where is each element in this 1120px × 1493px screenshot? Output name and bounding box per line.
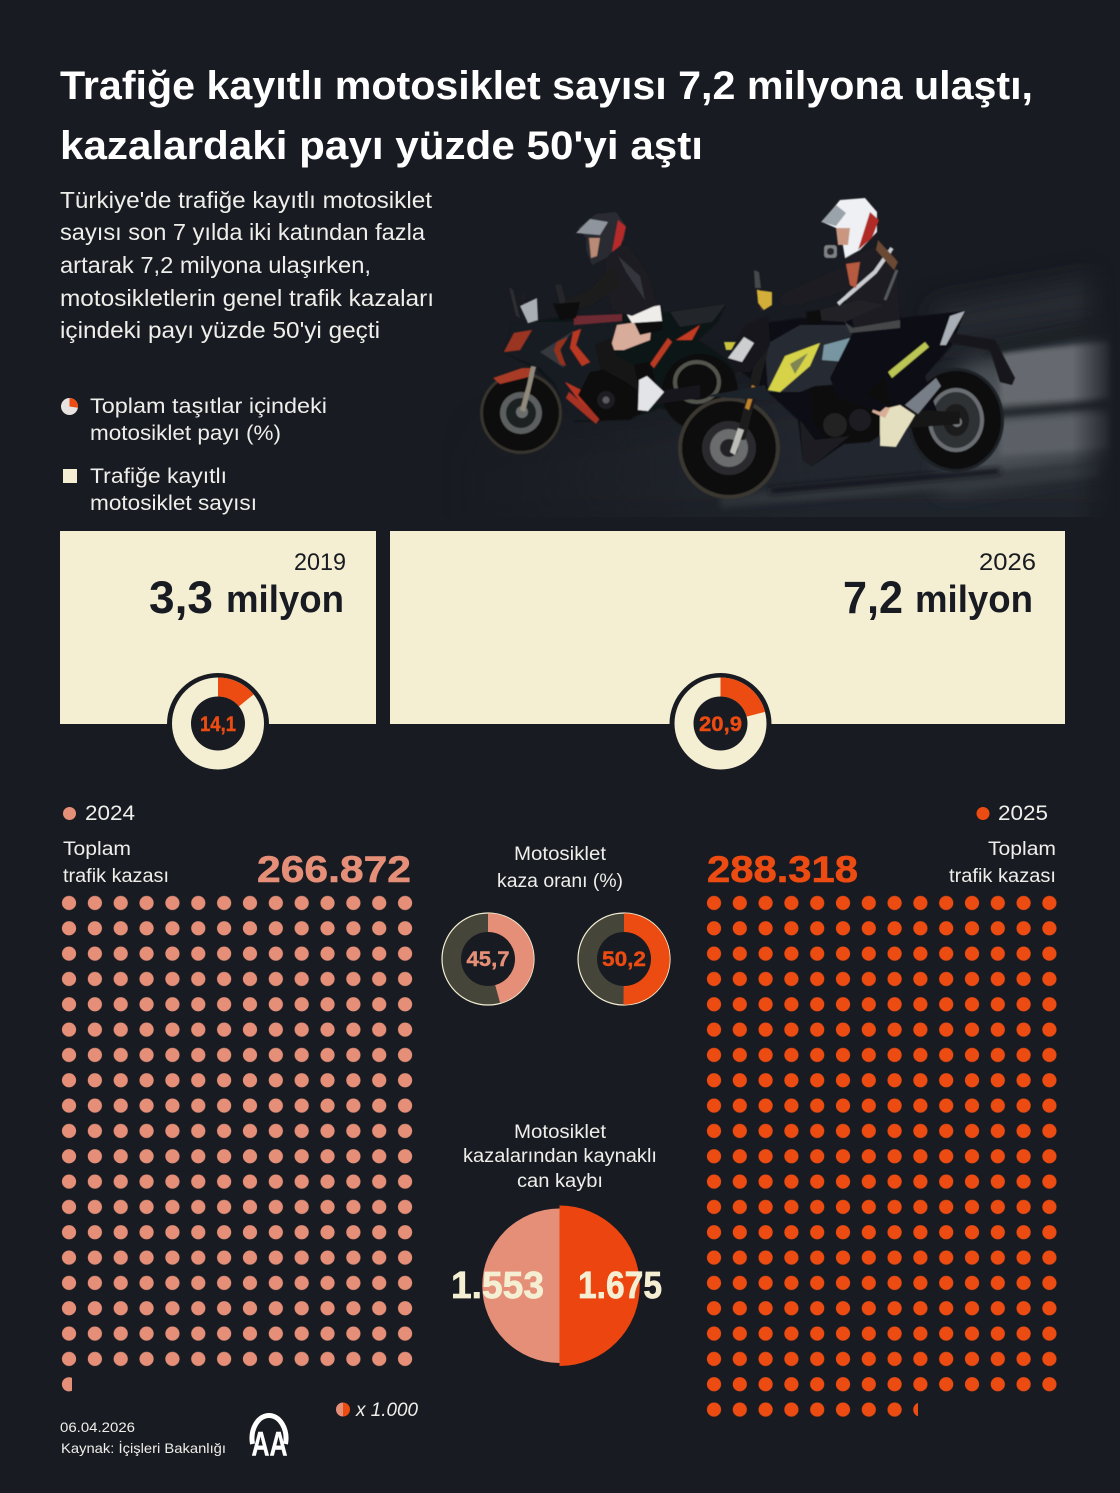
intro text block [60, 187, 434, 343]
rear wheel [662, 354, 738, 430]
tail and seat [670, 304, 726, 327]
legend: registered motorcycles: motosiklet sayısı [90, 492, 257, 515]
dot chart: 2024 accidents [56, 890, 418, 1391]
panel: 2026: milyon [915, 579, 1033, 621]
legend: motorcycle share: Toplam taşıtlar içindeki [90, 395, 327, 418]
back motorcycle and rider [480, 212, 742, 454]
road background with motion streaks [674, 278, 1110, 517]
intro text block: artarak 7,2 milyona ulaşırken, [60, 252, 371, 278]
legend: registered motorcycles [63, 465, 257, 515]
silhouette [503, 304, 735, 422]
donut: 2025 rate [578, 913, 670, 1005]
helmet and action camera [822, 198, 877, 258]
icon: cream square [63, 469, 77, 483]
heading: 2025 [976, 802, 1048, 825]
donut: 2024 rate [442, 913, 534, 1005]
heading: fatalities [463, 1122, 657, 1192]
intro text block: Türkiye'de trafiğe kayıtlı motosiklet [60, 187, 433, 213]
heading: 2024: 2024 [85, 802, 135, 825]
rider jacket and arms [845, 245, 900, 330]
half pies: fatalities: 1.675 [578, 1265, 662, 1307]
value: total accidents 2025: 288.318 [707, 849, 858, 890]
logo: AA [252, 1415, 288, 1464]
label: total accidents 2025 [949, 839, 1056, 887]
panel: 2026: 2026 [979, 549, 1036, 576]
heading: 2024 [63, 802, 135, 825]
swingarm and exhaust [907, 408, 960, 428]
half pies: fatalities: 1.553 [451, 1265, 544, 1307]
fairing [503, 316, 624, 420]
panel: 2019: 3,3 [149, 572, 213, 623]
rider jacket and arm [605, 245, 657, 316]
logo: AA: AA [252, 1426, 288, 1464]
donut: 2026 share [670, 673, 772, 775]
donut: 2026 share: 20,9 [699, 713, 742, 736]
label: total accidents 2025: Toplam [988, 839, 1056, 860]
panel: 2019: 2019 [294, 549, 346, 576]
helmet [578, 212, 626, 265]
legend: motorcycle share [61, 395, 327, 445]
front wheel [480, 372, 562, 454]
tail plate [950, 333, 1015, 385]
label: total accidents 2024 [63, 839, 169, 887]
rear frame and seat [946, 320, 948, 322]
donut: 2019 share [167, 673, 269, 775]
intro text block: motosikletlerin genel trafik kazaları [60, 285, 434, 311]
title [60, 64, 1033, 168]
panel: 2026 [390, 531, 1065, 724]
label: total accidents 2024: Toplam [63, 839, 131, 860]
engine [810, 378, 895, 445]
heading: fatalities: kazalarından kaynaklı [463, 1146, 657, 1167]
icon: share pie [61, 398, 78, 415]
dot chart: 2025 accidents [701, 890, 1062, 1422]
heading: fatalities: can kaybı [517, 1171, 603, 1192]
fender and fork [493, 368, 535, 384]
heading: motorcycle accident rate: Motosiklet [514, 844, 607, 865]
rear wheel [908, 368, 1004, 472]
value: total accidents 2024: 266.872 [257, 849, 411, 890]
silhouette [726, 311, 965, 466]
label: total accidents 2025: trafik kazası [949, 866, 1056, 887]
rider leg, boot and shoe [610, 320, 652, 350]
front wheel [678, 397, 780, 499]
tank and side panels [765, 324, 854, 393]
heading: motorcycle accident rate [497, 844, 623, 892]
intro text block: içindeki payı yüzde 50'yi geçti [60, 317, 380, 343]
donut: 2025 rate: 50,2 [602, 948, 646, 971]
gloves and mirror [757, 290, 772, 310]
rider boot and leg [880, 405, 915, 447]
front fork and headlight [739, 348, 768, 440]
heading: motorcycle accident rate: kaza oranı (%) [497, 871, 623, 892]
intro text block: sayısı son 7 yılda iki katından fazla [60, 219, 425, 245]
label: total accidents 2024: trafik kazası [63, 866, 169, 887]
title: kazalardaki payı yüzde 50'yi aştı [60, 124, 703, 168]
belly pan [800, 420, 850, 466]
photo: two motorcycle riders on a road [480, 197, 1110, 517]
panel: 2026: 7,2 [843, 572, 903, 623]
heading: fatalities: Motosiklet [514, 1122, 607, 1143]
front motorcycle and rider [678, 198, 1015, 499]
engine [578, 362, 660, 420]
heading: 2025: 2025 [998, 802, 1048, 825]
donut: 2024 rate: 45,7 [466, 948, 510, 971]
panel: 2019: milyon [226, 579, 344, 621]
panel: 2019 [60, 531, 376, 724]
title: Trafiğe kayıtlı motosiklet sayısı 7,2 milyona ulaştı, [60, 64, 1033, 108]
date and source: Kaynak: İçişleri Bakanlığı [61, 1439, 226, 1456]
donut: 2019 share: 14,1 [200, 713, 236, 736]
date and source: 06.04.2026 [60, 1419, 135, 1435]
legend: registered motorcycles: Trafiğe kayıtlı [90, 465, 227, 488]
windscreen and mirrors [520, 298, 538, 323]
legend: motorcycle share: motosiklet payı (%) [90, 422, 281, 445]
legend: dot scale: x 1.000 [355, 1400, 418, 1421]
date and source [60, 1419, 226, 1456]
half pies: fatalities [451, 1206, 662, 1366]
